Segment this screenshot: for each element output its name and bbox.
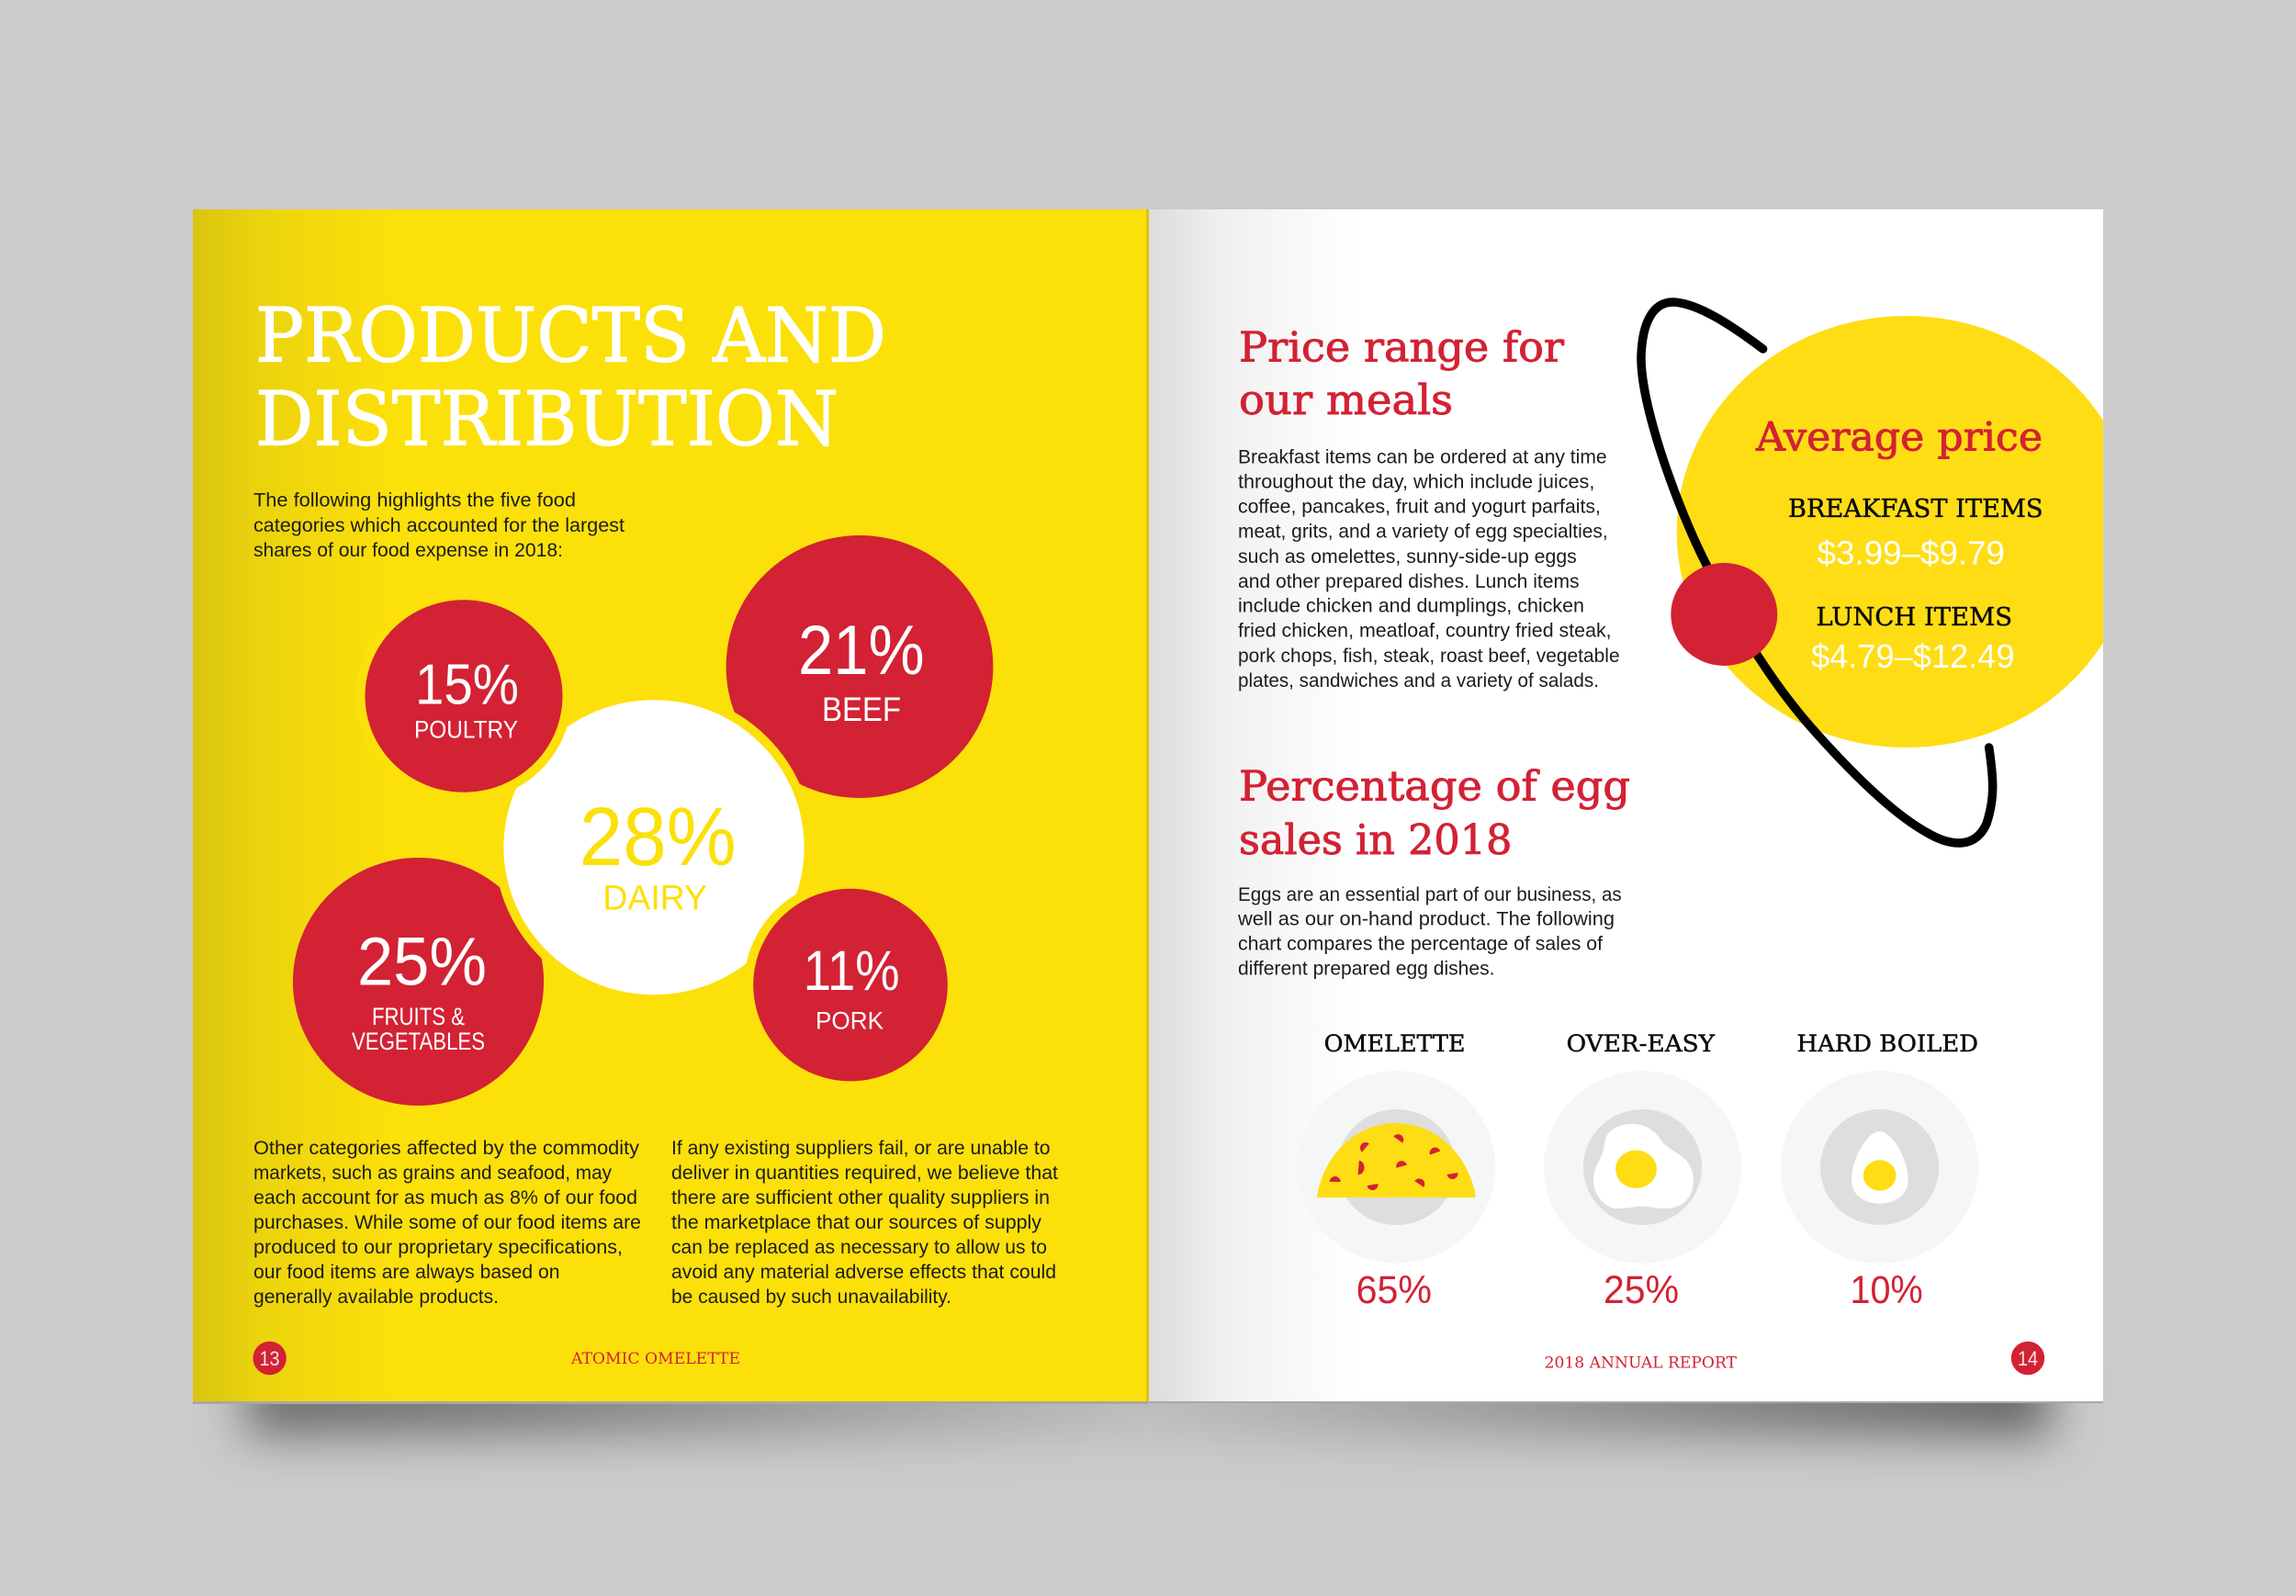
price range text: pork chops, fish, steak, roast beef, vegetable: [1238, 646, 1620, 667]
circle: beef 21%: BEEF: [822, 691, 901, 728]
egg chart: hard boiled: [1781, 1030, 1978, 1312]
yellow planet: [1677, 316, 2136, 747]
heading: price range: our meals: [1239, 376, 1453, 424]
circle: poultry 15%: POULTRY: [414, 716, 518, 744]
body text column 1: [253, 1138, 641, 1308]
body text column 1: purchases. While some of our food items are: [253, 1212, 641, 1233]
price range text: meat, grits, and a variety of egg specialties,: [1238, 522, 1608, 543]
body text column 1: generally available products.: [253, 1287, 499, 1308]
icon: boiled egg: [1851, 1131, 1908, 1204]
circle: dairy 28%: [503, 700, 805, 995]
egg chart: omelette: [1298, 1030, 1495, 1312]
lunch price: $4.79–$12.49: [1811, 637, 2015, 675]
body text column 1: Other categories affected by the commodity: [253, 1138, 640, 1159]
egg chart: omelette: 65%: [1356, 1268, 1432, 1312]
body text column 2: can be replaced as necessary to allow us to: [671, 1237, 1047, 1258]
price range text: plates, sandwiches and a variety of salads.: [1238, 670, 1599, 691]
heading: egg sales: Percentage of egg: [1239, 762, 1630, 811]
price range text: fried chicken, meatloaf, country fried steak,: [1238, 621, 1612, 642]
heading: price range: [1239, 322, 1564, 424]
average price heading: Average price: [1755, 415, 2043, 461]
egg chart: hard boiled: 10%: [1850, 1268, 1923, 1312]
body text column 2: If any existing suppliers fail, or are unable to: [671, 1138, 1051, 1159]
egg sales text: [1237, 884, 1622, 980]
title: DISTRIBUTION: [255, 377, 838, 464]
egg chart: omelette: OMELETTE: [1324, 1030, 1466, 1057]
circle: pork 11%: [753, 889, 948, 1081]
price range text: include chicken and dumplings, chicken: [1238, 596, 1584, 617]
body text column 2: [671, 1138, 1058, 1308]
circle: dairy 28%: 28%: [580, 792, 737, 883]
body text column 2: there are sufficient other quality suppliers in: [671, 1187, 1050, 1208]
average price graphic: [1641, 302, 2136, 843]
left page panel: [193, 209, 1149, 1404]
page number 14: 14: [2018, 1347, 2038, 1370]
egg sales text: Eggs are an essential part of our business, as: [1238, 884, 1622, 905]
egg chart: over-easy: OVER-EASY: [1567, 1030, 1716, 1057]
price range text: throughout the day, which include juices,: [1238, 471, 1594, 492]
body text column 1: our food items are always based on: [253, 1262, 560, 1283]
circle: beef 21%: 21%: [798, 612, 925, 690]
lunch items label: LUNCH ITEMS: [1817, 602, 2012, 632]
body text column 1: produced to our proprietary specifications,: [253, 1237, 623, 1258]
price range text: Breakfast items can be ordered at any time: [1238, 446, 1607, 467]
circle: fruits and vegetables 25%: [293, 858, 544, 1106]
heading: egg sales: sales in 2018: [1239, 815, 1512, 864]
heading: price range: Price range for: [1239, 322, 1564, 371]
circle: pork 11%: PORK: [816, 1006, 884, 1034]
circle: poultry 15%: [366, 600, 562, 792]
price range text: and other prepared dishes. Lunch items: [1238, 571, 1580, 592]
body text column 2: the marketplace that our sources of supply: [671, 1212, 1041, 1233]
page number 13: 13: [259, 1347, 279, 1370]
title: [255, 294, 886, 464]
circle: poultry 15%: 15%: [415, 654, 519, 717]
egg sales text: different prepared egg dishes.: [1238, 959, 1495, 980]
circle: fruits and vegetables 25%: 25%: [357, 924, 487, 1000]
body text column 1: markets, such as grains and seafood, may: [253, 1163, 612, 1184]
body text column 2: deliver in quantities required, we believe that: [671, 1163, 1058, 1184]
orbit ring: [1641, 302, 1993, 843]
circle: fruits and vegetables 25%: FRUITS &: [372, 1003, 465, 1030]
circle: pork 11%: 11%: [804, 939, 900, 1002]
egg sales text: chart compares the percentage of sales of: [1238, 934, 1603, 955]
title: PRODUCTS AND: [255, 294, 886, 380]
egg chart: over-easy: [1544, 1030, 1741, 1312]
egg sales text: well as our on-hand product. The following: [1237, 909, 1615, 930]
circle: fruits and vegetables 25%: VEGETABLES: [352, 1028, 485, 1055]
body text column 2: be caused by such unavailability.: [671, 1287, 951, 1308]
intro text: The following highlights the five food: [253, 490, 576, 511]
circle chart: food categories: [293, 535, 993, 1106]
footer: atomic omelette: ATOMIC OMELETTE: [570, 1350, 740, 1368]
icon: omelette: [1317, 1123, 1476, 1197]
egg chart: over-easy: 25%: [1604, 1268, 1679, 1312]
circle: dairy 28%: DAIRY: [602, 879, 707, 917]
page number 14: [2011, 1342, 2044, 1375]
page shadow: [246, 1368, 2050, 1434]
intro text: [253, 490, 625, 561]
price range text: such as omelettes, sunny-side-up eggs: [1238, 546, 1577, 568]
intro text: shares of our food expense in 2018:: [253, 540, 563, 561]
price range text: [1238, 446, 1620, 691]
body text column 2: avoid any material adverse effects that could: [671, 1262, 1056, 1283]
body text column 1: each account for as much as 8% of our food: [253, 1187, 637, 1208]
breakfast items label: BREAKFAST ITEMS: [1788, 494, 2043, 523]
icon: fried egg: [1593, 1124, 1694, 1208]
heading: egg sales: [1239, 762, 1630, 864]
right page panel: [1149, 209, 2136, 1403]
circle: beef 21%: [726, 535, 993, 798]
footer: annual report: 2018 ANNUAL REPORT: [1545, 1354, 1738, 1372]
egg chart: hard boiled: HARD BOILED: [1796, 1030, 1978, 1057]
page number 13: [253, 1342, 287, 1375]
intro text: categories which accounted for the largest: [253, 515, 625, 536]
price range text: coffee, pancakes, fruit and yogurt parfaits,: [1238, 496, 1601, 517]
red moon: [1671, 563, 1777, 666]
breakfast price: $3.99–$9.79: [1818, 534, 2005, 571]
